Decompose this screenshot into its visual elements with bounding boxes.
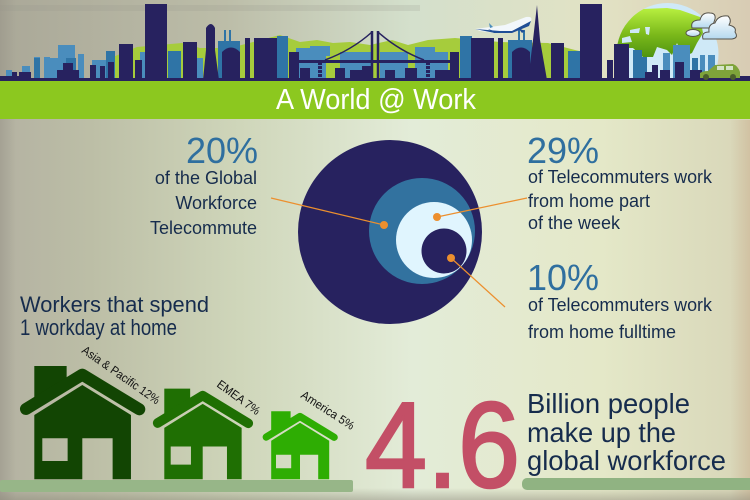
house: Asia and Pacific [26, 366, 139, 479]
mid blue buildings [34, 30, 698, 80]
bridge [298, 31, 450, 80]
stat: 29% [527, 130, 713, 233]
heading: workers: 1 workday at home [20, 315, 177, 340]
concentric circle chart [298, 140, 482, 324]
stat: 29%: from home part [528, 191, 650, 211]
skyline banner [0, 4, 750, 81]
label: EMEA 7%: EMEA 7% [214, 377, 263, 418]
title banner: A World @ Work [276, 84, 476, 116]
icon: airplane [475, 17, 531, 33]
stat: 29%: 29% [527, 130, 599, 171]
stat: 20%: of the Global [155, 168, 257, 188]
text: billion people [527, 388, 726, 476]
heading: workers: Workers that spend [20, 292, 209, 317]
hills [113, 35, 600, 80]
stat: 10% [527, 257, 713, 342]
house: America [266, 411, 334, 479]
stat: 20%: 20% [186, 130, 258, 171]
icon: clouds [686, 13, 736, 39]
navy buildings [0, 4, 750, 81]
stat: 20%: Telecommute [150, 218, 257, 238]
light blue buildings [6, 45, 715, 80]
house: EMEA [158, 389, 248, 479]
label: Asia and Pacific 12%: Asia & Pacific 12% [79, 343, 163, 407]
text: billion people: make up the [527, 417, 676, 448]
globe [618, 3, 718, 78]
stat: 29%: of the week [528, 213, 621, 233]
stat: 20%: Workforce [175, 193, 257, 213]
callout lines [271, 198, 527, 307]
text: billion people: global workforce [527, 445, 726, 476]
stat: 10%: 10% [527, 257, 599, 298]
stat: 10%: of Telecommuters work [528, 295, 713, 315]
text: billion people: Billion people [527, 388, 690, 419]
shelf right [522, 478, 750, 490]
label: America 5%: America 5% [298, 388, 357, 433]
heading: workers [20, 292, 209, 340]
title banner [0, 81, 750, 119]
stat: 10%: from home fulltime [528, 322, 676, 342]
icon: car [700, 64, 740, 80]
shelf left [0, 480, 353, 492]
stat: 20% [150, 130, 258, 238]
stat: 29%: of Telecommuters work [528, 167, 713, 187]
